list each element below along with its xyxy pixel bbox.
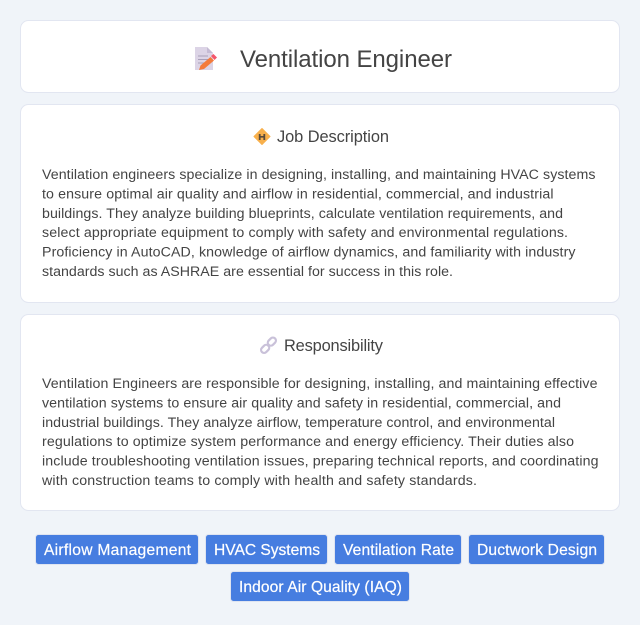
text block: job description paragraph: standards such as ASHRAE are essential for success in this role. — [42, 264, 453, 280]
heading: Responsibility: Responsibility — [284, 337, 384, 355]
text block: job description paragraph — [42, 167, 596, 280]
tag: Ductwork Design — [468, 534, 604, 564]
text block: responsibility paragraph — [41, 376, 598, 489]
text block: job description paragraph: to ensure optimal air quality and airflow in residential, commercial, and industrial — [42, 186, 554, 202]
icon: chain link — [260, 336, 277, 354]
panel: job description — [20, 104, 620, 302]
text block: responsibility paragraph: Ventilation Engineers are responsible for designing, installing, and maintaining effective — [42, 376, 598, 392]
tag: Indoor Air Quality (IAQ) — [230, 572, 410, 602]
tag: Ventilation Rate: Ventilation Rate — [343, 542, 454, 559]
tag: Airflow Management: Airflow Management — [44, 542, 192, 559]
text block: responsibility paragraph: include troubleshooting ventilation issues, preparing technical reports, and coordinating — [42, 454, 598, 470]
text block: responsibility paragraph: ventilation systems to ensure air quality and safety in residential, commercial, and — [42, 395, 561, 411]
text block: responsibility paragraph: industrial buildings. They analyze airflow, temperature control, and environmental — [42, 415, 555, 431]
text block: responsibility paragraph: regulations to optimize system performance and energy efficiency. Their duties also — [42, 434, 574, 450]
tag: HVAC Systems: HVAC Systems — [214, 542, 320, 559]
tags row — [36, 534, 604, 602]
tag: Ductwork Design: Ductwork Design — [477, 542, 597, 559]
icon: document with pencil — [195, 47, 217, 70]
tag: Indoor Air Quality (IAQ): Indoor Air Quality (IAQ) — [239, 579, 402, 596]
panel: title — [20, 20, 620, 92]
text block: responsibility paragraph: with construction teams to comply with health and safety standards. — [41, 473, 477, 489]
text block: job description paragraph: buildings. They analyze building blueprints, calculate ventilation requirements, and — [42, 206, 563, 222]
tag: HVAC Systems — [206, 534, 328, 564]
text block: job description paragraph: Proficiency in AutoCAD, knowledge of airflow dynamics, and familiarity with industry — [42, 245, 576, 261]
heading: Job Description: Job Description — [277, 128, 389, 146]
text block: job description paragraph: Ventilation engineers specialize in designing, installing, and maintaining HVAC systems — [42, 167, 596, 183]
tag: Ventilation Rate — [334, 534, 462, 564]
text block: job description paragraph: select appropriate equipment to comply with safety and environmental regulations. — [42, 225, 568, 241]
tag: Airflow Management — [36, 534, 198, 564]
heading: Ventilation Engineer: Ventilation Engineer — [240, 46, 452, 73]
icon: road sign diamond — [254, 128, 270, 144]
panel: responsibility — [20, 314, 620, 510]
